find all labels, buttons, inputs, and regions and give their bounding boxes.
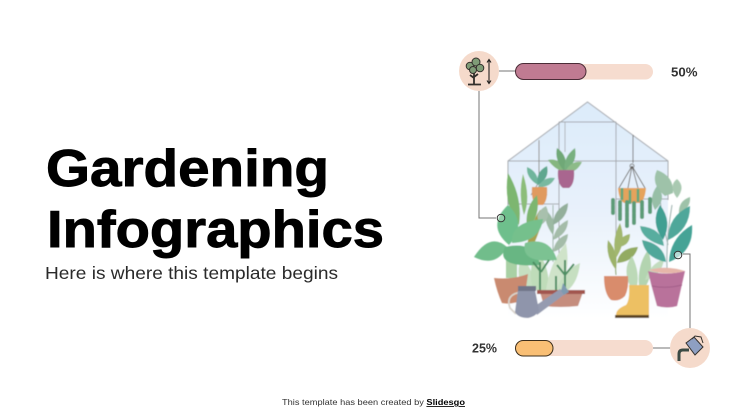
title: Gardening <box>46 140 329 198</box>
terracotta pot <box>604 276 628 300</box>
fern behind trough <box>537 203 568 262</box>
pale grass <box>518 243 580 290</box>
greenhouse frame <box>508 102 668 320</box>
pale plant behind boot <box>626 250 664 286</box>
teal plant <box>640 170 692 268</box>
bar fill <box>516 340 553 356</box>
hanging plant: pink pot <box>548 122 582 188</box>
left big plant <box>474 205 557 278</box>
greenhouse illustration <box>474 102 692 320</box>
title <box>46 140 384 259</box>
title: Infographics <box>47 201 384 259</box>
connector: top icon to plant <box>479 91 505 222</box>
progress row: 25% <box>472 328 710 368</box>
watering can <box>509 283 569 318</box>
hanging plant: basket <box>613 135 650 226</box>
connector: bottom icon to plant <box>674 251 690 328</box>
bar track <box>515 340 653 356</box>
subtitle: Here is where this template begins <box>45 263 338 283</box>
yellow boot <box>615 285 649 318</box>
trough planter <box>533 260 585 307</box>
olive plant <box>607 223 638 275</box>
pink pot <box>648 268 685 308</box>
bar track <box>515 64 653 80</box>
footer credit: This template has been created by Slidesgo <box>282 397 465 407</box>
progress row: 50% <box>459 51 698 91</box>
sword leaves behind left plant <box>507 173 545 248</box>
icon: watering can <box>670 328 710 368</box>
hanging plant: orange pot <box>527 140 555 205</box>
bar fill <box>516 64 586 80</box>
value: 50% <box>671 66 698 80</box>
icon: tree with height arrow <box>459 51 499 91</box>
value: 25% <box>472 342 497 356</box>
left pot <box>494 274 528 304</box>
